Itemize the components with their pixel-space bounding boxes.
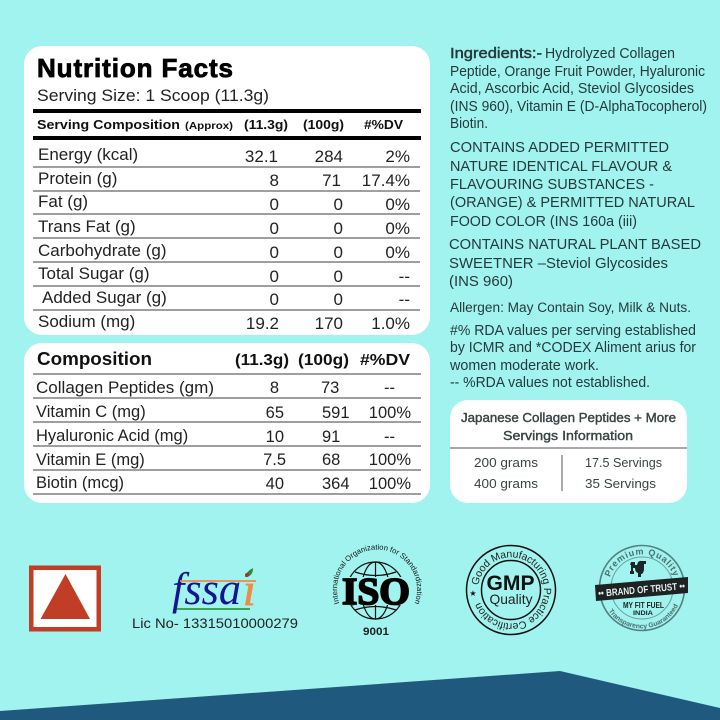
text block: sweetener statement: (INS 960) <box>449 274 513 290</box>
row: hyaluronic acid <box>36 427 395 446</box>
row: sodium <box>38 312 410 333</box>
grams column: 400 grams <box>474 476 539 491</box>
row: protein: 71 <box>322 171 341 190</box>
row: sodium: 1.0% <box>371 314 410 333</box>
servings heading: Servings Information <box>503 428 633 443</box>
row: vitamin e: 68 <box>322 451 340 469</box>
row: biotin: 364 <box>322 475 350 493</box>
logo: gmp quality: Quality <box>490 591 532 607</box>
logo: brand of trust <box>595 544 688 632</box>
servings column: 35 Servings <box>585 476 657 491</box>
row: vitamin e: Vitamin E (mg) <box>36 451 145 469</box>
row: total sugar: Total Sugar (g) <box>38 264 150 283</box>
row: fat: 0 <box>334 195 343 214</box>
grams column <box>474 455 539 491</box>
row: carbohydrate <box>38 241 410 262</box>
row: trans fat <box>38 217 410 238</box>
row: fat: Fat (g) <box>38 192 88 211</box>
row: carbohydrate: 0 <box>334 243 343 262</box>
logo: gmp quality: Good Manufacturing Practice Certification <box>472 551 552 630</box>
row: biotin: Biotin (mcg) <box>36 474 124 492</box>
composition header: (100g) <box>298 352 349 369</box>
text block: added flavour statement: FLAVOURING SUBSTANCES - <box>450 177 654 193</box>
row: trans fat: 0% <box>385 219 410 238</box>
row: carbohydrate: 0 <box>270 243 279 262</box>
row: vitamin c: 65 <box>266 404 284 422</box>
icon: mascot figure <box>630 561 646 577</box>
panel: nutrition facts <box>24 46 430 335</box>
row: fat <box>38 192 410 214</box>
row: protein: 17.4% <box>362 171 410 190</box>
logo: brand of trust: Transparency Guaranteed <box>610 604 678 630</box>
row: vitamin e: 100% <box>369 451 411 469</box>
row: collagen peptides: -- <box>384 379 395 397</box>
text block: added flavour statement: CONTAINS ADDED PERMITTED <box>450 140 669 156</box>
logo: gmp quality: ★ <box>469 589 477 598</box>
row: hyaluronic acid: 91 <box>322 428 340 446</box>
row: trans fat: 0 <box>334 219 343 238</box>
table header: (100g) <box>303 117 344 132</box>
row: hyaluronic acid: -- <box>384 428 395 446</box>
text block: allergen: Allergen: May Contain Soy, Milk & Nuts. <box>450 300 691 315</box>
row: collagen peptides: Collagen Peptides (gm) <box>36 379 214 397</box>
row: trans fat: Trans Fat (g) <box>38 217 136 236</box>
table header: #%DV <box>364 117 403 132</box>
row: vitamin c: Vitamin C (mg) <box>36 403 146 421</box>
logo: iso 9001: 9001 <box>363 626 389 638</box>
text block: ingredients: Hydrolyzed Collagen <box>545 46 675 62</box>
row: added sugar <box>42 288 410 309</box>
text block: ingredients: Ingredients:- <box>450 46 542 62</box>
row: energy: Energy (kcal) <box>38 145 138 164</box>
row: added sugar: 0 <box>270 290 279 309</box>
composition header <box>37 349 410 369</box>
row: energy: 32.1 <box>245 147 278 166</box>
row: hyaluronic acid: 10 <box>266 428 284 446</box>
row: total sugar <box>38 264 410 286</box>
row: added sugar: 0 <box>334 290 343 309</box>
row: biotin <box>36 474 411 493</box>
logo: brand of trust: INDIA <box>633 610 653 617</box>
row: biotin: 40 <box>266 475 284 493</box>
row: trans fat: 0 <box>270 219 279 238</box>
serving size: Serving Size: 1 Scoop (11.3g) <box>37 86 269 105</box>
grams column: 200 grams <box>474 455 539 470</box>
servings column <box>585 455 662 491</box>
row: sodium: Sodium (mg) <box>38 312 135 331</box>
text block: sweetener statement: SWEETNER –Steviol Glycosides <box>449 256 668 272</box>
text block: sweetener statement: CONTAINS NATURAL PLANT BASED <box>449 237 701 253</box>
text block: ingredients <box>450 46 707 132</box>
row: protein <box>38 169 410 190</box>
text block: added flavour statement <box>450 140 695 230</box>
text block: rda notes: -- %RDA values not established. <box>450 375 650 391</box>
icon: triangle mark <box>31 568 99 629</box>
logo: brand of trust: Premium Quality <box>604 550 678 577</box>
logo: fssai: fssa <box>172 563 241 614</box>
row: sodium: 19.2 <box>246 314 279 333</box>
servings heading: Japanese Collagen Peptides + More <box>461 410 676 425</box>
row: vitamin e: 7.5 <box>263 451 286 469</box>
text block: added flavour statement: NATURE IDENTICAL FLAVOUR & <box>450 159 672 175</box>
row: protein: 8 <box>270 171 279 190</box>
text block: rda notes: #% RDA values per serving established <box>450 323 696 339</box>
row: collagen peptides <box>36 379 395 397</box>
composition header: Composition <box>37 349 152 369</box>
row: total sugar: 0 <box>334 267 343 286</box>
row: fat: 0% <box>385 195 410 214</box>
row: collagen peptides: 73 <box>321 379 339 397</box>
row: fat: 0 <box>270 195 279 214</box>
text block: rda notes: by ICMR and *CODEX Aliment arius for <box>450 340 696 356</box>
text block: ingredients: Biotin. <box>450 116 488 132</box>
text block: added flavour statement: FOOD COLOR (INS 160a (iii) <box>450 214 637 230</box>
row: total sugar: 0 <box>270 267 279 286</box>
text block: ingredients: Peptide, Orange Fruit Powder, Hyaluronic <box>450 64 705 80</box>
row: sodium: 170 <box>315 314 343 333</box>
servings heading <box>461 410 676 443</box>
row: protein: Protein (g) <box>38 169 117 188</box>
logo: iso 9001: ISO <box>342 571 410 613</box>
row: energy: 284 <box>315 147 343 166</box>
text block: ingredients: Acid, Ascorbic Acid, Steviol Glycosides <box>450 81 694 97</box>
row: energy: 2% <box>385 147 410 166</box>
text block: ingredients: (INS 960), Vitamin E (D-AlphaTocopherol) <box>450 99 707 115</box>
row: energy <box>38 145 410 166</box>
row: carbohydrate: Carbohydrate (g) <box>38 241 167 260</box>
logo: iso 9001: International Organization for Standardization <box>332 544 422 604</box>
text block: sweetener statement <box>449 237 701 290</box>
row: vitamin c: 591 <box>322 404 350 422</box>
logo: gmp quality: GMP <box>486 572 534 595</box>
panel: servings information <box>450 400 687 503</box>
row: added sugar: -- <box>399 290 410 309</box>
table header: Serving Composition <box>37 117 180 132</box>
panel: composition <box>24 343 430 503</box>
row: collagen peptides: 8 <box>270 379 279 397</box>
row: added sugar: Added Sugar (g) <box>42 288 167 307</box>
row: vitamin c <box>36 403 411 422</box>
row: carbohydrate: 0% <box>385 243 410 262</box>
logo: iso 9001 <box>332 544 422 638</box>
table header: (Approx) <box>185 120 233 132</box>
text block: added flavour statement: (ORANGE) & PERMITTED NATURAL <box>450 195 695 211</box>
table header: (11.3g) <box>244 117 288 132</box>
row: vitamin e <box>36 451 411 469</box>
composition header: (11.3g) <box>235 352 289 369</box>
row: total sugar: -- <box>399 267 410 286</box>
text block: rda notes <box>449 323 696 391</box>
licence number: Lic No- 13315010000279 <box>132 615 298 631</box>
logo: fssai: ı <box>243 564 256 615</box>
row: vitamin c: 100% <box>369 404 411 422</box>
logo: brand of trust: •• BRAND OF TRUST •• <box>598 581 686 600</box>
table header <box>37 117 403 132</box>
row: biotin: 100% <box>369 475 411 493</box>
composition header: #%DV <box>360 352 410 369</box>
servings column: 17.5 Servings <box>585 455 662 470</box>
logo: brand of trust: MY FIT FUEL <box>623 600 664 610</box>
row: hyaluronic acid: Hyaluronic Acid (mg) <box>36 427 188 445</box>
title: Nutrition Facts <box>37 53 233 83</box>
bottom dark band <box>0 671 720 720</box>
text block: rda notes: women moderate work. <box>449 358 599 374</box>
